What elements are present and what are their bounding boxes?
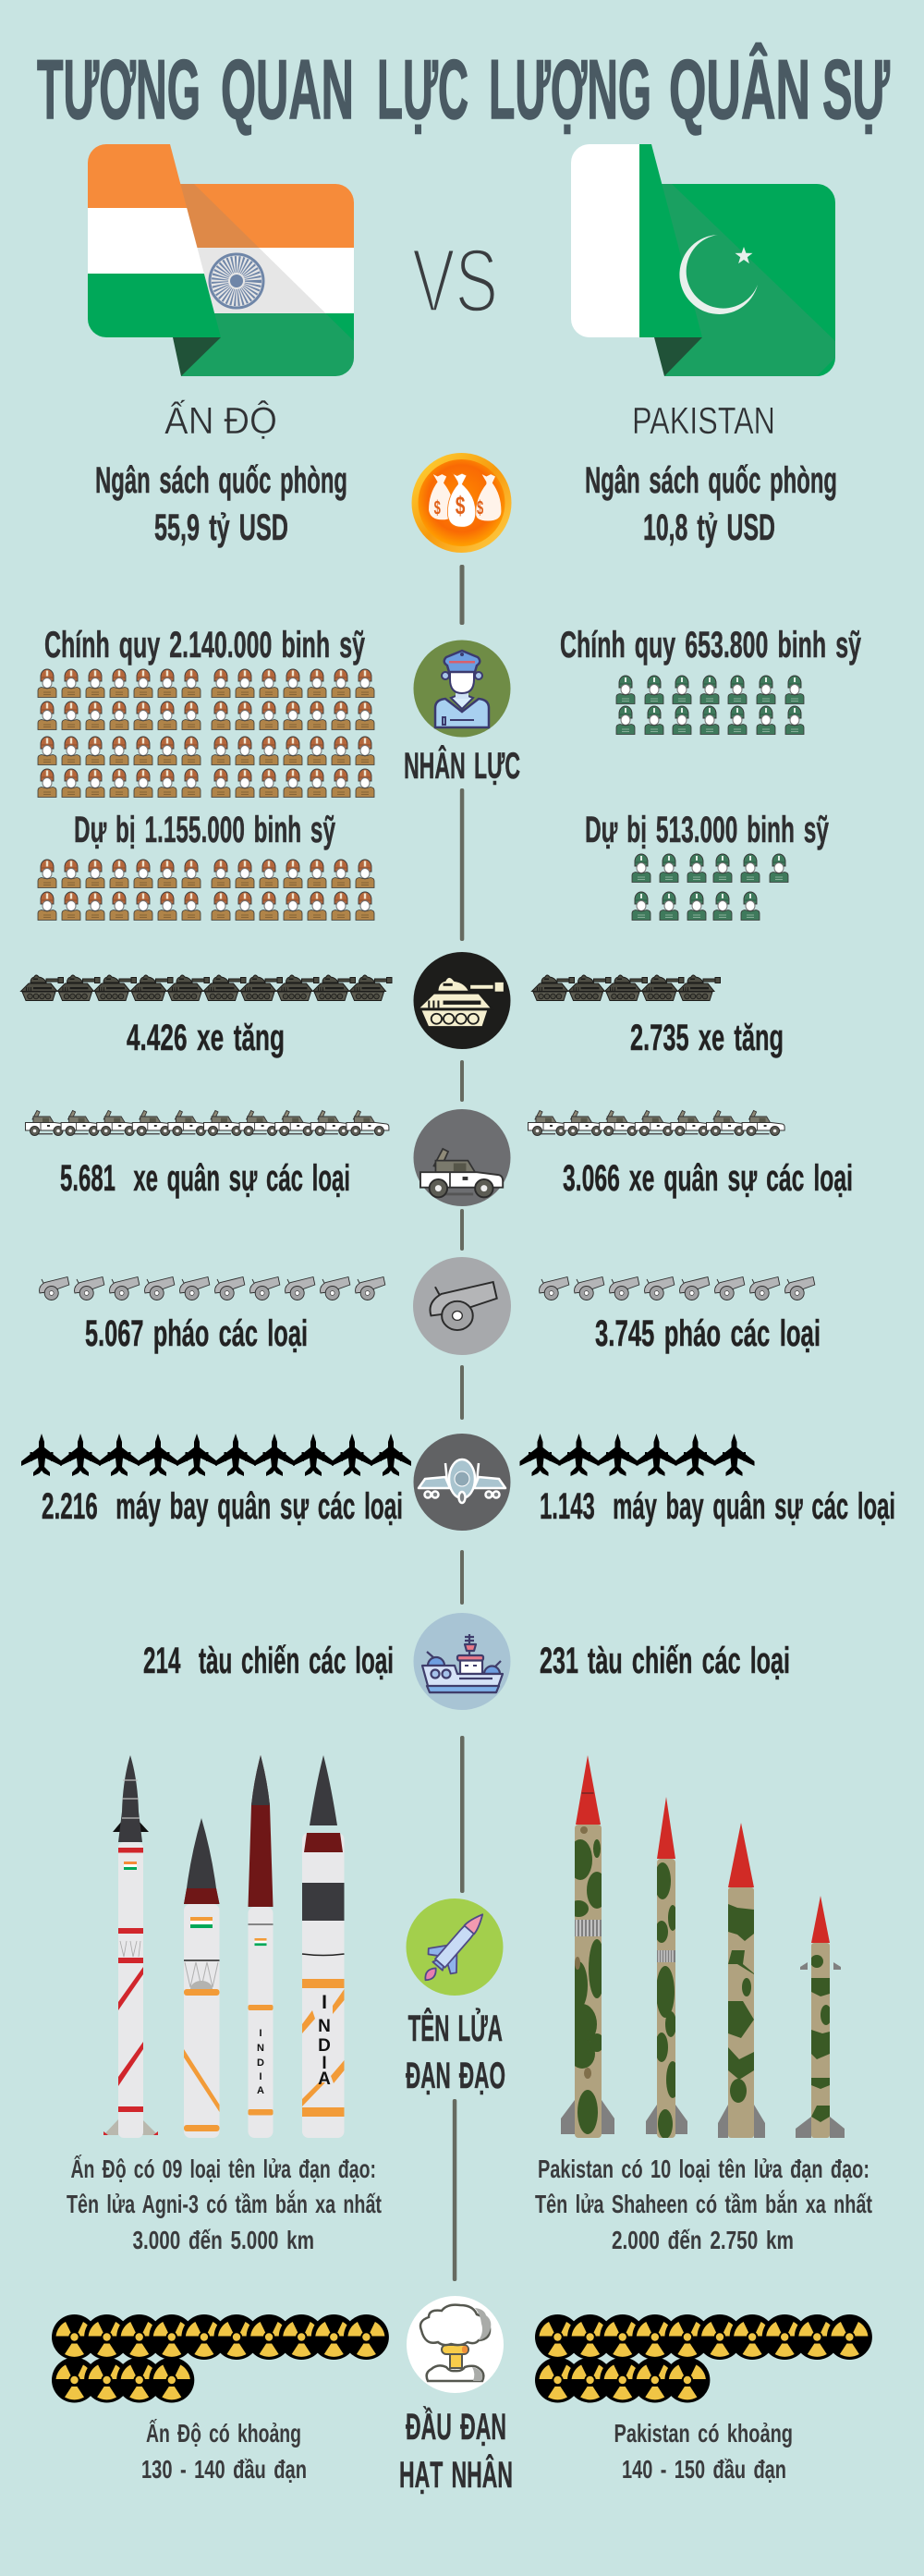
Pakistan missiles note: 2.000 đến 2.750 km <box>612 2226 794 2254</box>
missile India 3: A <box>257 2085 264 2096</box>
icon: money bags coin: $ <box>477 497 483 519</box>
panel: military vehicles <box>26 1109 853 1206</box>
missile India 1 <box>103 1755 158 2138</box>
icon: mushroom cloud <box>407 2296 504 2393</box>
panel: nuclear warheads <box>52 2296 872 2496</box>
Pakistan budget: 10,8 tỷ USD <box>643 507 775 548</box>
India missiles note: Ấn Độ có 09 loại tên lửa đạn đạo: <box>70 2155 376 2183</box>
missile India 3: N <box>257 2043 264 2054</box>
icon: money bags coin: $ <box>456 492 466 520</box>
missile India 4: I <box>322 1992 327 2013</box>
flag: India <box>88 144 356 376</box>
missile India 4: I <box>322 2054 327 2073</box>
India warships count: 214 tàu chiến các loại <box>143 1641 394 1681</box>
Pakistan warheads note <box>614 2419 793 2484</box>
flag: Pakistan <box>571 144 835 376</box>
Pakistan warheads note: 140 - 150 đầu đạn <box>622 2455 786 2484</box>
Pakistan reserves pictogram <box>632 854 788 921</box>
versus label: VS <box>412 230 498 331</box>
India tanks pictogram <box>20 975 392 1000</box>
missile India 2 <box>184 1818 220 2138</box>
heading: ballistic missiles: ĐẠN ĐẠO <box>406 2056 505 2096</box>
icon: fighter jet <box>414 1434 510 1531</box>
India aircraft pictogram <box>21 1434 411 1476</box>
Pakistan tanks count: 2.735 xe tăng <box>630 1018 784 1058</box>
Pakistan artillery pictogram <box>540 1277 815 1300</box>
India missiles note: 3.000 đến 5.000 km <box>133 2226 314 2254</box>
India budget <box>95 460 347 548</box>
panel: warships <box>143 1613 790 1710</box>
heading: nuclear warheads <box>399 2405 513 2496</box>
India reserves label: Dự bị 1.155.000 binh sỹ <box>74 810 335 850</box>
Pakistan warheads note: Pakistan có khoảng <box>614 2419 793 2448</box>
Pakistan missiles <box>561 1755 845 2139</box>
country name: Pakistan: PAKISTAN <box>632 399 775 442</box>
missile India 4 <box>302 1755 344 2138</box>
Pakistan regulars pictogram <box>616 676 804 734</box>
India warheads pictogram <box>52 2314 389 2403</box>
panel: aircraft <box>21 1434 895 1531</box>
country name: India: ẤN ĐỘ <box>164 399 277 442</box>
India vehicles pictogram <box>26 1111 389 1135</box>
India tanks count: 4.426 xe tăng <box>127 1018 285 1058</box>
title: LỰC <box>377 43 468 137</box>
Pakistan aircraft pictogram <box>519 1434 754 1476</box>
India missiles note: Tên lửa Agni-3 có tầm bắn xa nhất <box>67 2190 382 2218</box>
missile India 4: A <box>318 2069 331 2089</box>
missile Pakistan 2 <box>646 1797 687 2139</box>
heading: nuclear warheads: HẠT NHÂN <box>399 2453 513 2496</box>
icon: rocket <box>407 1898 503 1996</box>
India aircraft count: 2.216 máy bay quân sự các loại <box>42 1486 403 1527</box>
panel: ballistic missiles <box>67 1755 872 2254</box>
icon: officer <box>414 640 510 738</box>
India vehicles count: 5.681 xe quân sự các loại <box>60 1158 350 1199</box>
Pakistan budget <box>585 460 837 548</box>
India warheads note <box>141 2419 307 2484</box>
title <box>37 43 890 137</box>
panel: manpower <box>38 625 861 921</box>
missile Pakistan 1 <box>561 1755 614 2138</box>
panel: defence budget <box>95 453 837 553</box>
missile India 3: I <box>259 2028 262 2039</box>
missile India 3 <box>248 1755 274 2138</box>
panel: artillery <box>40 1257 821 1355</box>
India warheads note: Ấn Độ có khoảng <box>146 2419 301 2448</box>
Pakistan tanks pictogram <box>532 975 721 1000</box>
icon: money bags coin: $ <box>434 497 441 519</box>
panel: tanks <box>20 952 784 1058</box>
heading: ballistic missiles <box>406 2007 505 2096</box>
title: LƯỢNG <box>489 43 651 137</box>
India regulars label: Chính quy 2.140.000 binh sỹ <box>44 625 365 665</box>
India missiles <box>103 1755 344 2138</box>
icon: jeep <box>414 1109 510 1206</box>
title: QUAN <box>221 43 354 137</box>
India warheads note: 130 - 140 đầu đạn <box>141 2455 307 2484</box>
India missiles note <box>67 2155 382 2254</box>
Pakistan vehicles pictogram <box>529 1111 784 1135</box>
India artillery pictogram <box>40 1277 385 1300</box>
icon: money bags coin <box>412 453 512 553</box>
India budget: 55,9 tỷ USD <box>154 507 288 548</box>
heading: ballistic missiles: TÊN LỬA <box>408 2007 503 2049</box>
icon: warship <box>414 1613 510 1710</box>
India budget: Ngân sách quốc phòng <box>95 460 347 501</box>
missile Pakistan 4 <box>796 1896 845 2138</box>
India reserves pictogram <box>38 860 374 921</box>
title: TƯƠNG <box>37 43 201 137</box>
heading: manpower: NHÂN LỰC <box>404 744 520 787</box>
missile India 4: D <box>318 2036 331 2056</box>
Pakistan missiles note <box>535 2155 872 2254</box>
Pakistan warheads pictogram <box>535 2314 872 2403</box>
missile India 4: N <box>318 2017 331 2036</box>
missile India 3: I <box>259 2071 262 2082</box>
missile India 3: D <box>257 2057 264 2069</box>
title: QUÂN <box>669 43 810 137</box>
India artillery count: 5.067 pháo các loại <box>85 1313 308 1354</box>
missile Pakistan 3 <box>718 1823 765 2138</box>
icon: cannon <box>413 1257 511 1355</box>
heading: nuclear warheads: ĐẦU ĐẠN <box>406 2405 506 2448</box>
icon: tank <box>414 952 510 1049</box>
India regulars pictogram <box>38 669 374 797</box>
